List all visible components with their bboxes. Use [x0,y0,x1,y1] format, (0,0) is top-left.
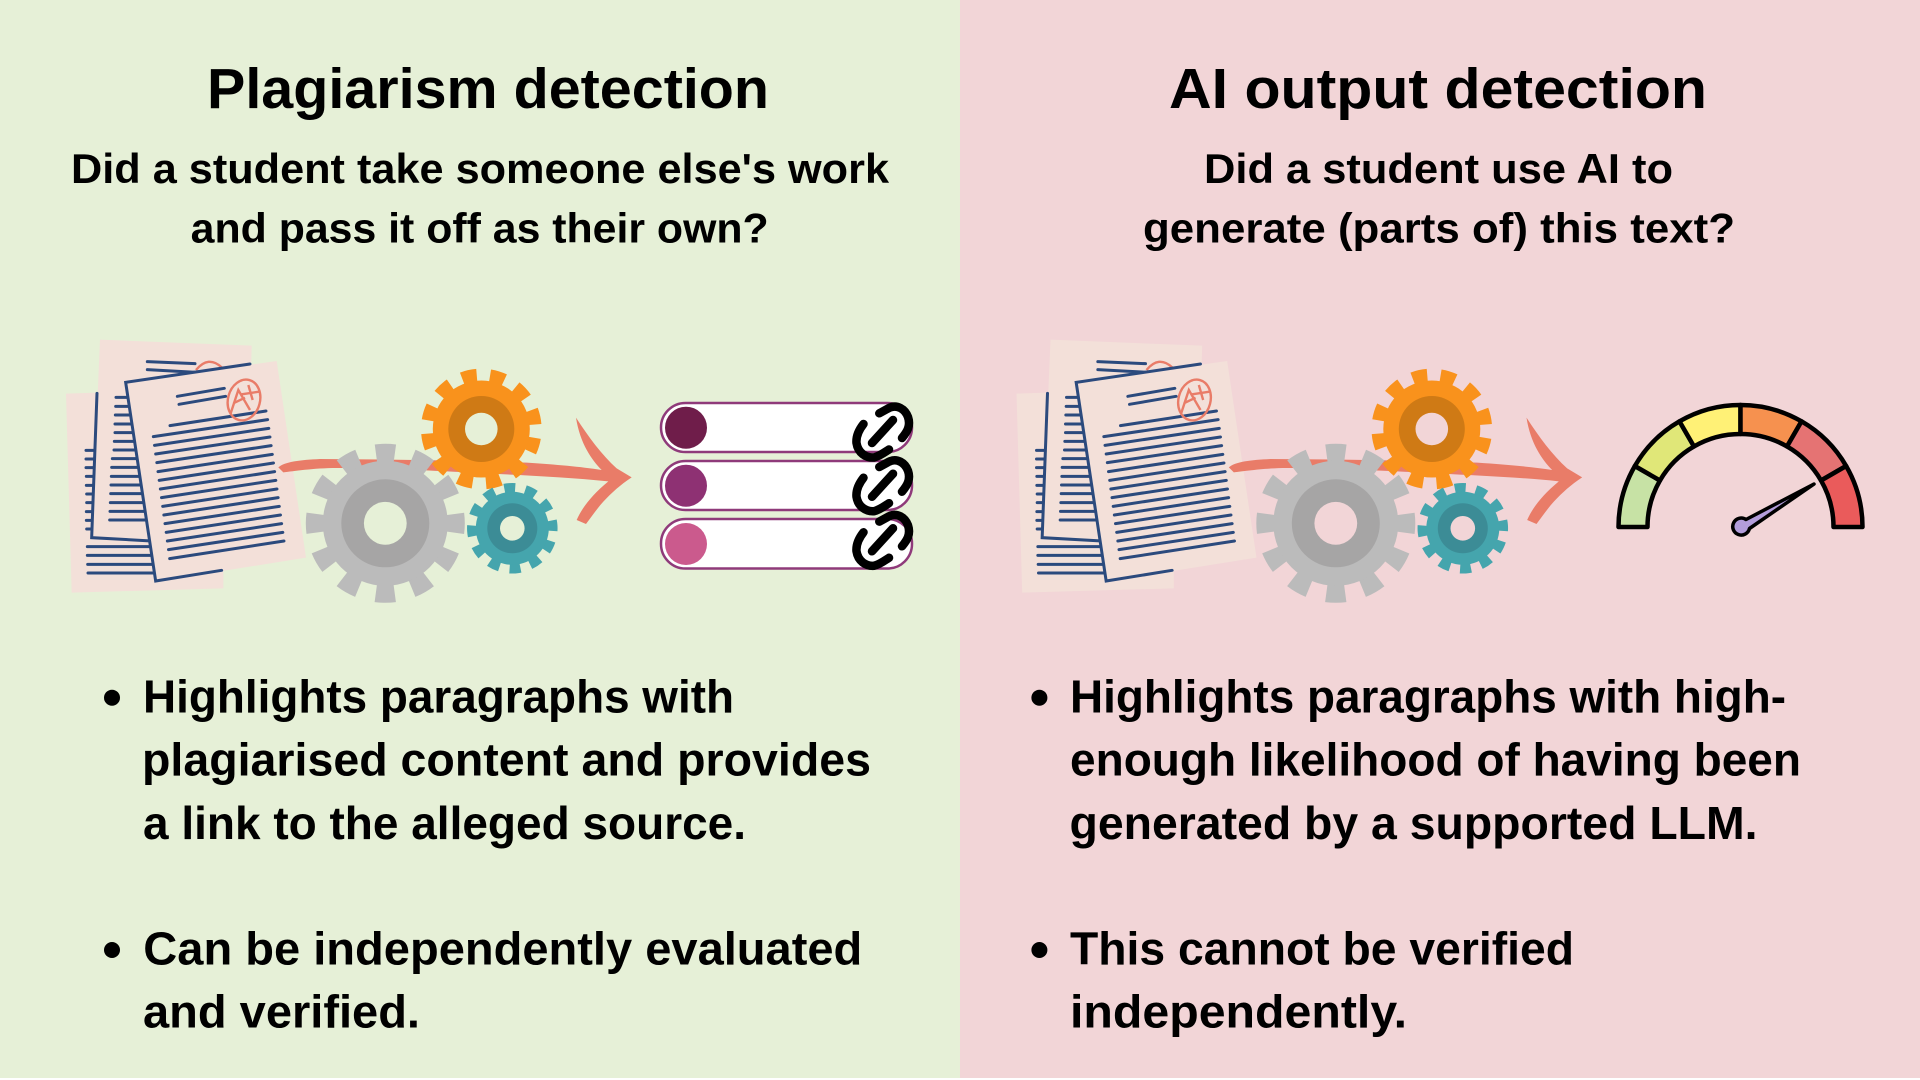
icon: gears [315,362,556,594]
bullet list: AI output detection: Highlights paragraphs with high- [1070,670,1786,722]
subheading: plagiarism question [71,145,890,252]
subheading: plagiarism question: Did a student take someone else's work [71,145,890,192]
panel: AI output detection [960,0,1920,1078]
bullet list: AI output detection [1031,670,1801,1038]
icon: gears [1265,362,1506,594]
bullet list: plagiarism detection: Highlights paragraphs with [143,670,734,722]
icon: stack of marked papers [1016,340,1256,593]
bullet list: AI output detection: generated by a supported LLM. [1070,797,1758,849]
subheading: AI question [1143,145,1735,252]
bullet list: AI output detection: independently. [1070,986,1407,1038]
gauge needle [1733,484,1814,535]
heading: AI output detection: AI output detection [1169,57,1707,121]
bullet list: plagiarism detection: Can be independently evaluated [143,922,862,974]
subheading: plagiarism question: and pass it off as their own? [191,204,769,252]
arrow: papers to result [278,418,632,524]
bullet list: plagiarism detection: a link to the alleged source. [143,797,746,849]
bullet list: plagiarism detection: plagiarised content and provides [142,734,871,786]
subheading: AI question: Did a student use AI to [1204,145,1673,192]
panel: plagiarism detection [0,0,960,1078]
bullet list: plagiarism detection [104,670,871,1038]
arrow: papers to gauge [1229,418,1582,524]
bullet list: plagiarism detection: and verified. [143,986,420,1038]
heading: plagiarism detection: Plagiarism detection [207,57,769,121]
icon: linked source list [661,403,912,568]
icon: stack of marked papers [66,340,306,593]
bullet list: AI output detection: enough likelihood of having been [1070,734,1801,786]
icon: likelihood gauge [1618,405,1862,535]
subheading: AI question: generate (parts of) this text? [1143,204,1735,252]
bullet list: AI output detection: This cannot be verified [1070,922,1574,974]
